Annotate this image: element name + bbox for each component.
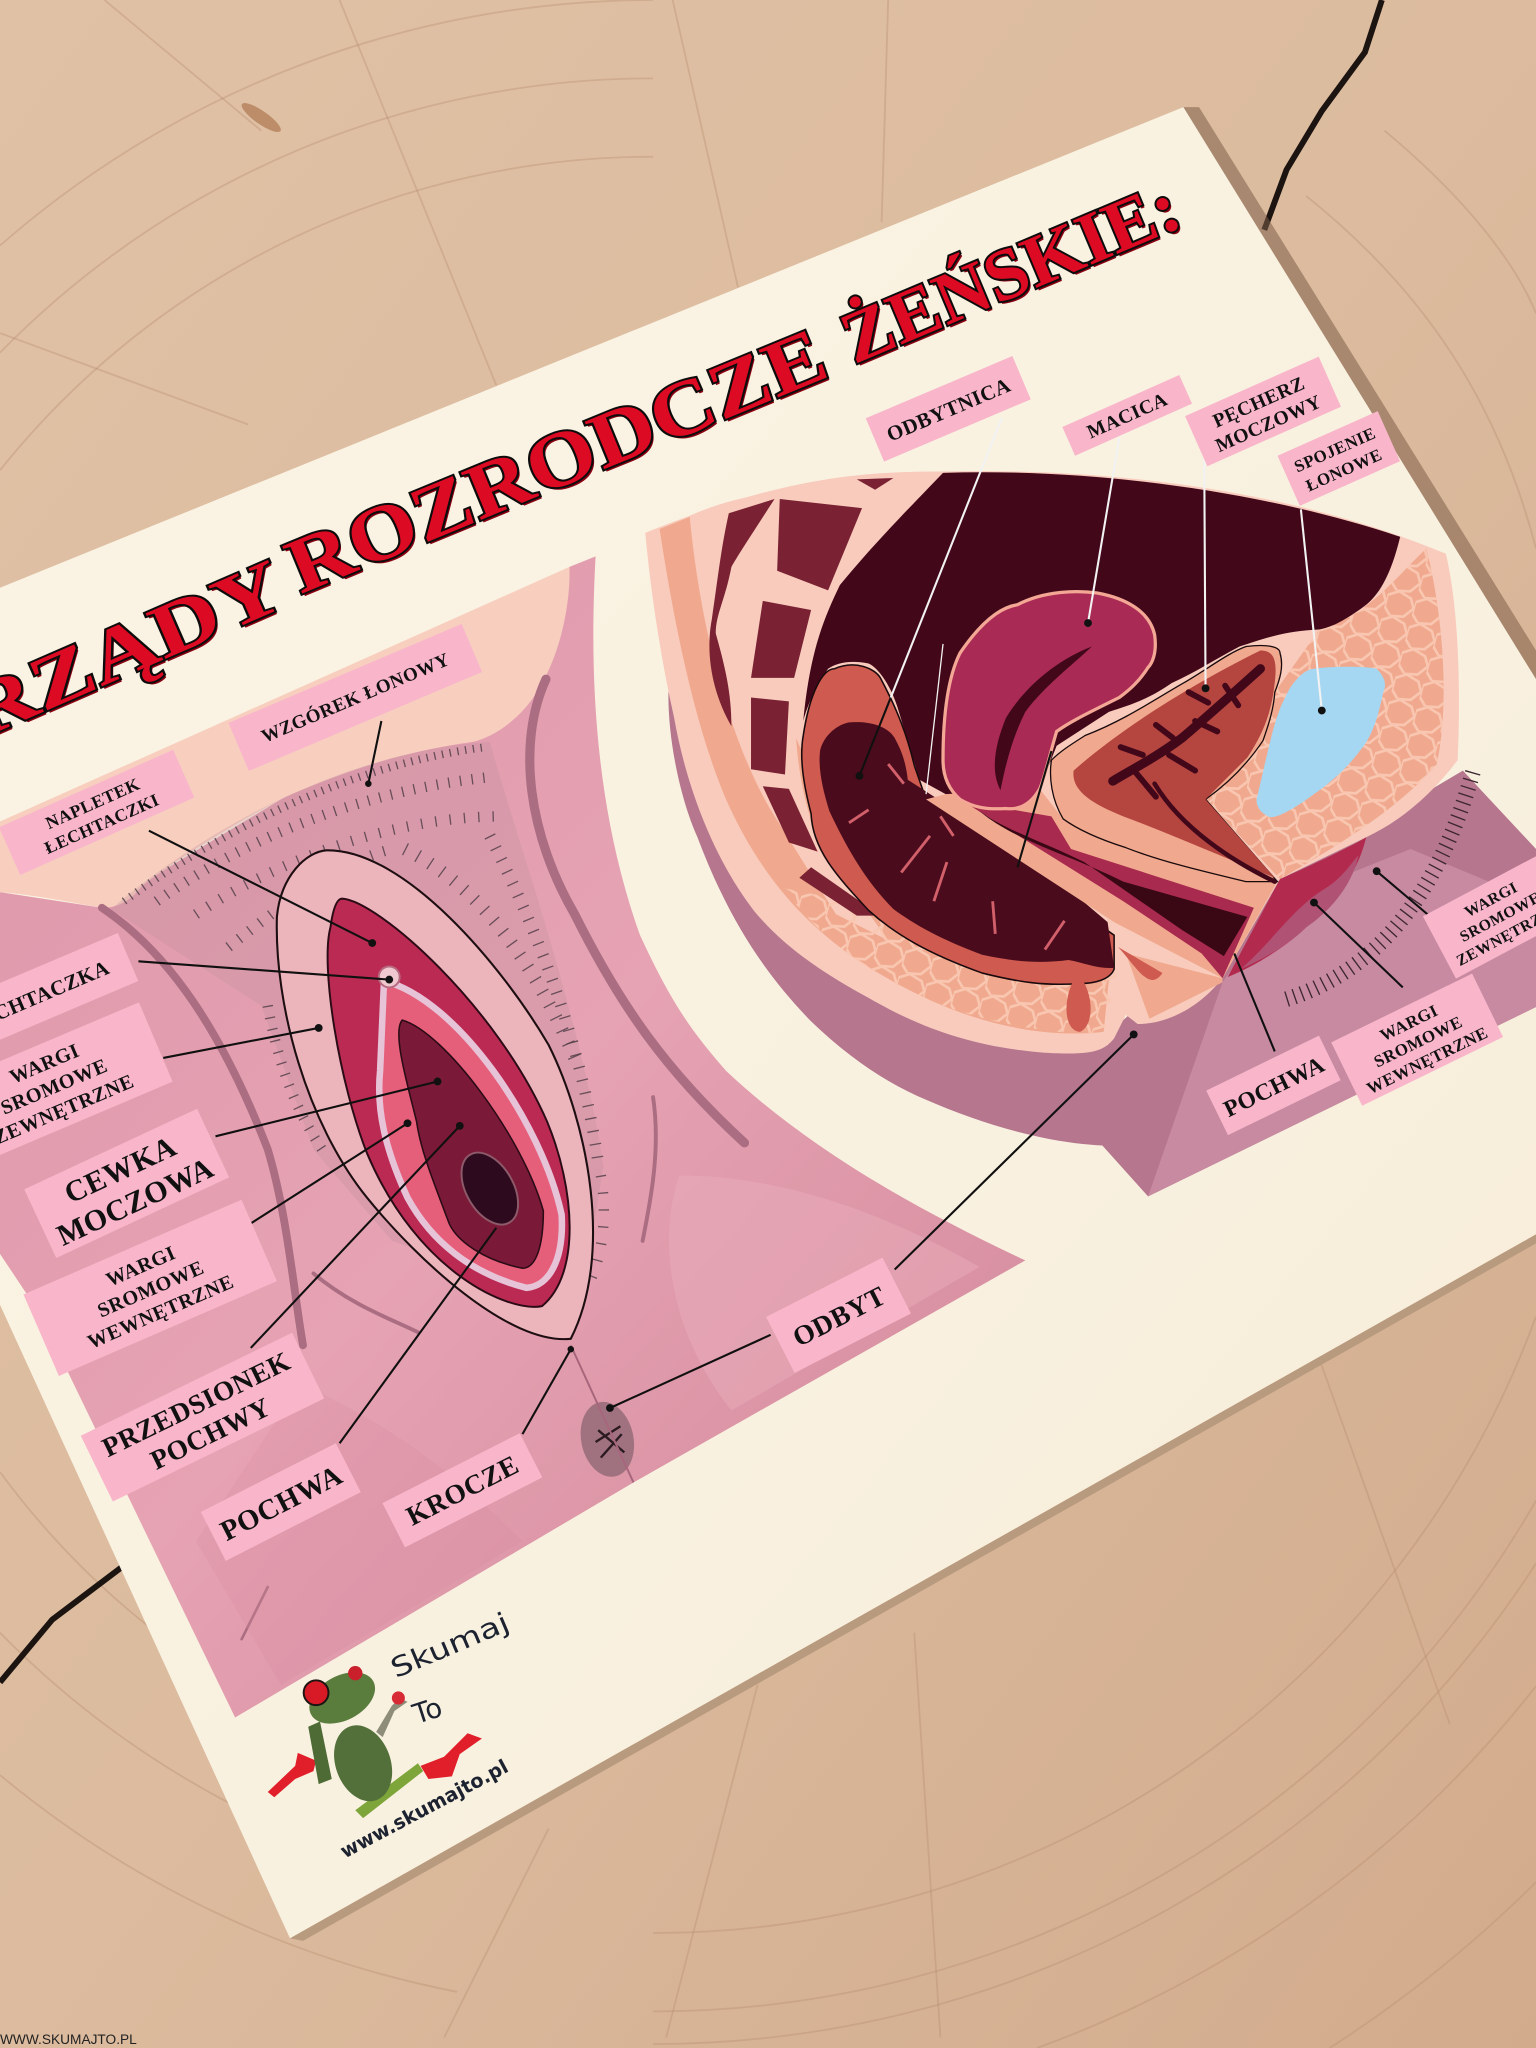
- label: przedsionek pochwy: POCHWY: [146, 1392, 275, 1476]
- hair area: [111, 742, 603, 1306]
- label: wargi sromowe wewnętrzne left: SROMOWE: [94, 1257, 208, 1322]
- label: przedsionek pochwy: PRZEDSIONEK: [97, 1346, 295, 1463]
- label: wargi sromowe wewnętrzne right: WEWNĘTRZNE: [1364, 1023, 1491, 1098]
- second organ core: [1073, 650, 1276, 878]
- label: pochwa right: [1206, 1036, 1341, 1135]
- frog foot: [421, 1733, 482, 1779]
- label: wargi sromowe zewnętrzne left: SROMOWE: [0, 1055, 111, 1119]
- spine blocks: [709, 478, 893, 916]
- label: cewka moczowa: CEWKA: [59, 1130, 182, 1210]
- title: ŻEŃSKIE:: [832, 168, 1194, 382]
- pointer lines: [138, 418, 1437, 1443]
- magenta band: [960, 799, 1254, 978]
- anus: [574, 1397, 641, 1482]
- label: napletek łechtaczki: NAPLETEK: [42, 774, 143, 833]
- label: przedsionek pochwy: [81, 1333, 324, 1502]
- bladder: [1256, 667, 1385, 817]
- label: krocze: [382, 1433, 542, 1547]
- rear peach layer: [660, 516, 1110, 1033]
- opening: [450, 1143, 530, 1234]
- watermark: WWW.SKUMAJTO.PL: [0, 2032, 137, 2047]
- skin folds: [102, 679, 744, 1639]
- right hair: [1287, 771, 1473, 999]
- label: wargi sromowe wewnętrzne right: WARGI: [1377, 1001, 1441, 1045]
- rectum: [820, 722, 1114, 968]
- label: łechtaczka: [0, 933, 138, 1058]
- title: ROZRODCZE: [274, 311, 838, 610]
- label: pochwa left: [201, 1443, 361, 1561]
- rectum wrapper: [802, 665, 1114, 984]
- label: wargi sromowe zewnętrzne left: [0, 1002, 173, 1168]
- logo text: www.skumajto.pl: [336, 1755, 512, 1863]
- logo text: Skumaj: [386, 1607, 514, 1685]
- label: cewka moczowa: MOCZOWA: [52, 1151, 219, 1253]
- upper pale area: [0, 567, 570, 908]
- title: [0, 165, 1194, 757]
- hair hatching: [124, 747, 604, 1287]
- label: pochwa right: POCHWA: [1220, 1052, 1329, 1123]
- second organ wall: [1051, 646, 1282, 882]
- front peach layer: [1206, 549, 1444, 879]
- label: wargi sromowe zewnętrzne right: [1423, 853, 1536, 979]
- frog leg: [355, 1763, 423, 1818]
- title: ŻEŃSKIE:: [829, 165, 1192, 379]
- label: spojenie łonowe: [1278, 411, 1400, 506]
- tissue band: [926, 789, 1277, 978]
- label: pęcherz moczowy: MOCZOWY: [1213, 392, 1325, 457]
- uterus cavity: [995, 647, 1092, 790]
- label: spojenie łonowe: SPOJENIE: [1291, 423, 1379, 476]
- panel: external anatomy: [0, 556, 1025, 1718]
- label: macica: MACICA: [1084, 389, 1171, 443]
- label: cewka moczowa: [24, 1109, 229, 1258]
- pointer dots: [315, 619, 1381, 1412]
- label: pochwa left: POCHWA: [215, 1459, 348, 1548]
- outer contour: [645, 471, 1459, 1053]
- back shape: [668, 683, 1536, 1196]
- label: macica: [1062, 375, 1192, 456]
- frog head: [301, 1662, 384, 1734]
- label: odbytnica: ODBYTNICA: [883, 373, 1014, 446]
- white ring: [379, 981, 562, 1288]
- dark chamber: [399, 1020, 543, 1268]
- wedge: [1228, 837, 1366, 977]
- title: ROZRODCZE: [276, 313, 841, 613]
- label: napletek łechtaczki: [0, 750, 194, 875]
- buttock tissue: [784, 888, 1117, 1034]
- lower folds: [1126, 953, 1223, 1019]
- label: spojenie łonowe: ŁONOWE: [1303, 445, 1385, 495]
- logo text: To: [408, 1692, 446, 1731]
- label: krocze: KROCZE: [401, 1449, 524, 1531]
- logo: frog: [268, 1662, 482, 1818]
- label: odbyt: ODBYT: [788, 1280, 891, 1353]
- label: pęcherz moczowy: PĘCHERZ: [1210, 373, 1308, 432]
- frog left hand: [268, 1753, 316, 1797]
- label: wargi sromowe zewnętrzne right: WARGI: [1462, 879, 1521, 921]
- label: pęcherz moczowy: [1185, 357, 1341, 466]
- label: wzgórek łonowy: WZGÓREK ŁONOWY: [258, 648, 453, 748]
- label: wargi sromowe wewnętrzne right: SROMOWE: [1371, 1012, 1466, 1071]
- label: wargi sromowe wewnętrzne left: [23, 1200, 277, 1376]
- label: wargi sromowe zewnętrzne left: WARGI: [6, 1040, 83, 1089]
- label: napletek łechtaczki: ŁECHTACZKI: [41, 789, 162, 858]
- logo text: [336, 1607, 514, 1863]
- dark canal: [960, 790, 1247, 956]
- label: wargi sromowe wewnętrzne right: [1331, 974, 1503, 1106]
- label: odbytnica: [866, 356, 1031, 462]
- label: wargi sromowe wewnętrzne left: WEWNĘTRZNE: [84, 1271, 237, 1354]
- abdominal cavity: [803, 472, 1400, 799]
- dark branching lumen: [1113, 669, 1275, 882]
- inner contour: [328, 899, 570, 1307]
- skin base: [0, 556, 1025, 1718]
- label: odbyt: [766, 1258, 911, 1373]
- uterus: [943, 592, 1155, 809]
- label: wzgórek łonowy: [228, 624, 482, 771]
- label: wargi sromowe wewnętrzne left: WARGI: [103, 1242, 179, 1291]
- small top structure: [379, 967, 400, 987]
- frog body: [324, 1717, 402, 1809]
- outer contour: [277, 850, 593, 1339]
- rectum folds: [849, 764, 1064, 950]
- panel: sagittal section: [645, 471, 1536, 1196]
